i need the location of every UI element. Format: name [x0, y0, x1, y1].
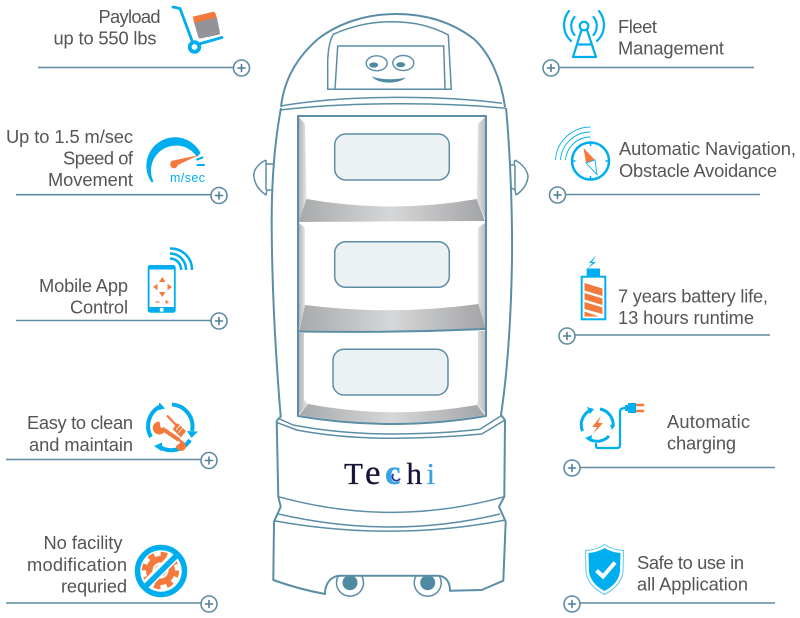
- Techi logo: h: [406, 456, 422, 491]
- Techi logo: e: [365, 453, 381, 492]
- icon: tools with cycle arrows: [148, 402, 198, 452]
- robot neck band: [281, 97, 506, 110]
- safe text: [637, 552, 748, 594]
- Techi logo: i: [426, 456, 436, 491]
- divider and marker: [564, 596, 775, 612]
- divider and marker: [6, 596, 217, 612]
- clean text: Easy to clean: [27, 412, 133, 433]
- charging text: charging: [667, 432, 736, 454]
- icon: cart: [173, 7, 222, 52]
- divider and marker: [550, 187, 760, 203]
- cabinet frame: [298, 116, 486, 424]
- callout: fleet management: [543, 11, 754, 76]
- robot dome head: [281, 14, 505, 107]
- mobile app text: [39, 275, 128, 318]
- face screen: [335, 46, 445, 89]
- callout: mobile app: [16, 248, 227, 329]
- clean text: and maintain: [29, 434, 133, 455]
- icon: battery: [582, 255, 605, 319]
- speed text: Up to 1.5 m/sec: [6, 126, 133, 147]
- facility text: modification: [27, 554, 127, 575]
- callout: safe to use: [564, 544, 775, 612]
- battery text: [618, 286, 768, 328]
- robot eyes: [366, 56, 414, 71]
- fleet text: Fleet: [618, 16, 657, 37]
- head screen housing: [328, 22, 451, 89]
- shelf one: [298, 199, 485, 222]
- icon: phone with wifi: [148, 248, 192, 313]
- speed text: Movement: [48, 169, 133, 190]
- robot smile: [372, 76, 406, 83]
- battery text: 13 hours runtime: [618, 307, 754, 328]
- robot side handles: [254, 160, 528, 195]
- divider and marker: [16, 313, 227, 329]
- fleet text: [618, 16, 724, 58]
- middle panel: [335, 242, 449, 287]
- navigation text: Obstacle Avoidance: [619, 160, 777, 181]
- robot illustration: [254, 14, 528, 596]
- right side strips: [477, 117, 485, 413]
- cabinet: [298, 116, 486, 424]
- mobile app text: Mobile App: [39, 275, 128, 296]
- left side strips: [299, 117, 308, 414]
- icon: speedometer: m/sec: [170, 171, 205, 185]
- Techi logo: c: [385, 453, 401, 492]
- icon: speedometer: [146, 137, 205, 185]
- icon: plug with charge cycle: [581, 403, 644, 448]
- divider and marker: [559, 328, 770, 344]
- speed text: Speed of: [63, 148, 134, 168]
- navigation text: Automatic Navigation,: [619, 138, 796, 159]
- shelf two: [299, 304, 486, 331]
- payload text: [54, 6, 160, 48]
- mobile app text: Control: [70, 296, 128, 318]
- robot base: [273, 416, 506, 594]
- top panel: [335, 134, 449, 180]
- battery text: 7 years battery life,: [618, 286, 768, 306]
- bottom panel: [333, 349, 448, 395]
- safe text: Safe to use in: [637, 552, 744, 573]
- icon: antenna tower: [564, 11, 604, 57]
- payload text: Payload: [98, 6, 160, 27]
- callout: automatic navigation: [550, 127, 796, 203]
- icon: gear prohibited: [138, 548, 184, 594]
- icon: compass with signal: [556, 127, 610, 180]
- callout: easy to clean: [6, 402, 217, 468]
- safe text: all Application: [637, 574, 748, 594]
- shelf three: [299, 404, 485, 423]
- navigation text: [619, 138, 796, 181]
- Techi logo: T: [344, 456, 363, 491]
- speed text: [6, 126, 134, 190]
- divider and marker: [16, 188, 227, 204]
- facility text: [27, 532, 127, 596]
- divider and marker: [543, 60, 754, 76]
- payload text: up to 550 lbs: [54, 28, 156, 48]
- divider and marker: [564, 460, 775, 476]
- callout: battery: [559, 255, 770, 344]
- divider and marker: [38, 60, 250, 76]
- facility text: No facility: [44, 532, 123, 553]
- robot wheels: [336, 575, 441, 596]
- Techi logo: [344, 453, 436, 492]
- callout: no facility modification: [6, 532, 217, 612]
- divider and marker: [6, 452, 217, 468]
- facility text: requried: [61, 576, 127, 596]
- callout: automatic charging: [564, 403, 775, 476]
- charging text: Automatic: [667, 411, 750, 432]
- charging text: [667, 411, 750, 454]
- callout: speed: [6, 126, 227, 204]
- clean text: [27, 412, 133, 455]
- robot torso outline: [272, 108, 512, 421]
- callout: payload: [38, 6, 250, 76]
- fleet text: Management: [618, 38, 724, 58]
- icon: shield with check: [586, 544, 624, 594]
